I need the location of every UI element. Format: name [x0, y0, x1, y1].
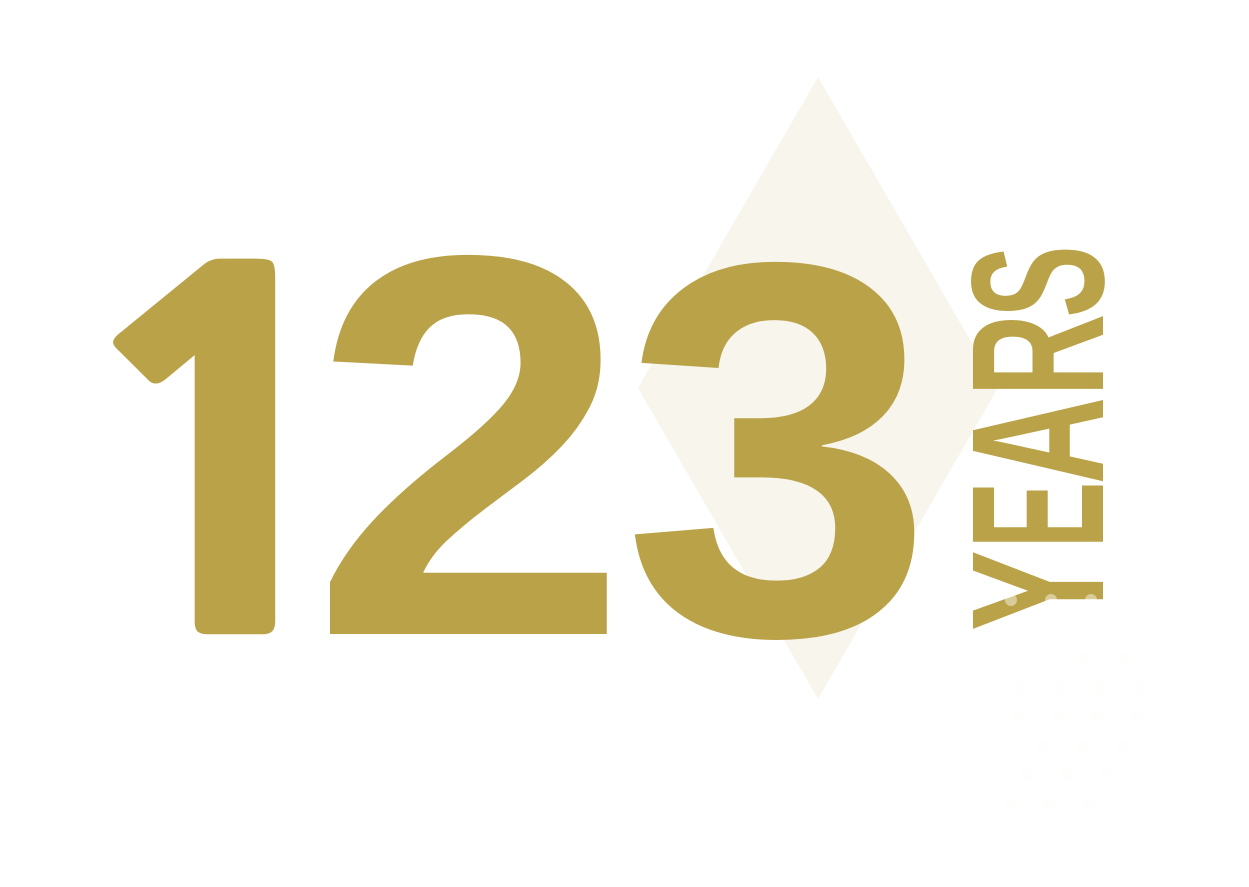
big number 123	[58, 143, 935, 750]
vertical label YEARS: Y	[931, 550, 1143, 631]
vertical label YEARS	[931, 245, 1144, 631]
vertical label YEARS: R	[933, 314, 1144, 397]
digit 2: 2	[310, 143, 630, 750]
vertical label YEARS: A	[931, 397, 1143, 484]
digit 3: 3	[622, 152, 935, 748]
digit 1: 1	[58, 221, 389, 699]
background diamond	[638, 77, 998, 699]
dot pattern overlay	[1004, 594, 1144, 811]
vertical label YEARS: S	[932, 245, 1143, 318]
vertical label YEARS: E	[933, 482, 1144, 548]
